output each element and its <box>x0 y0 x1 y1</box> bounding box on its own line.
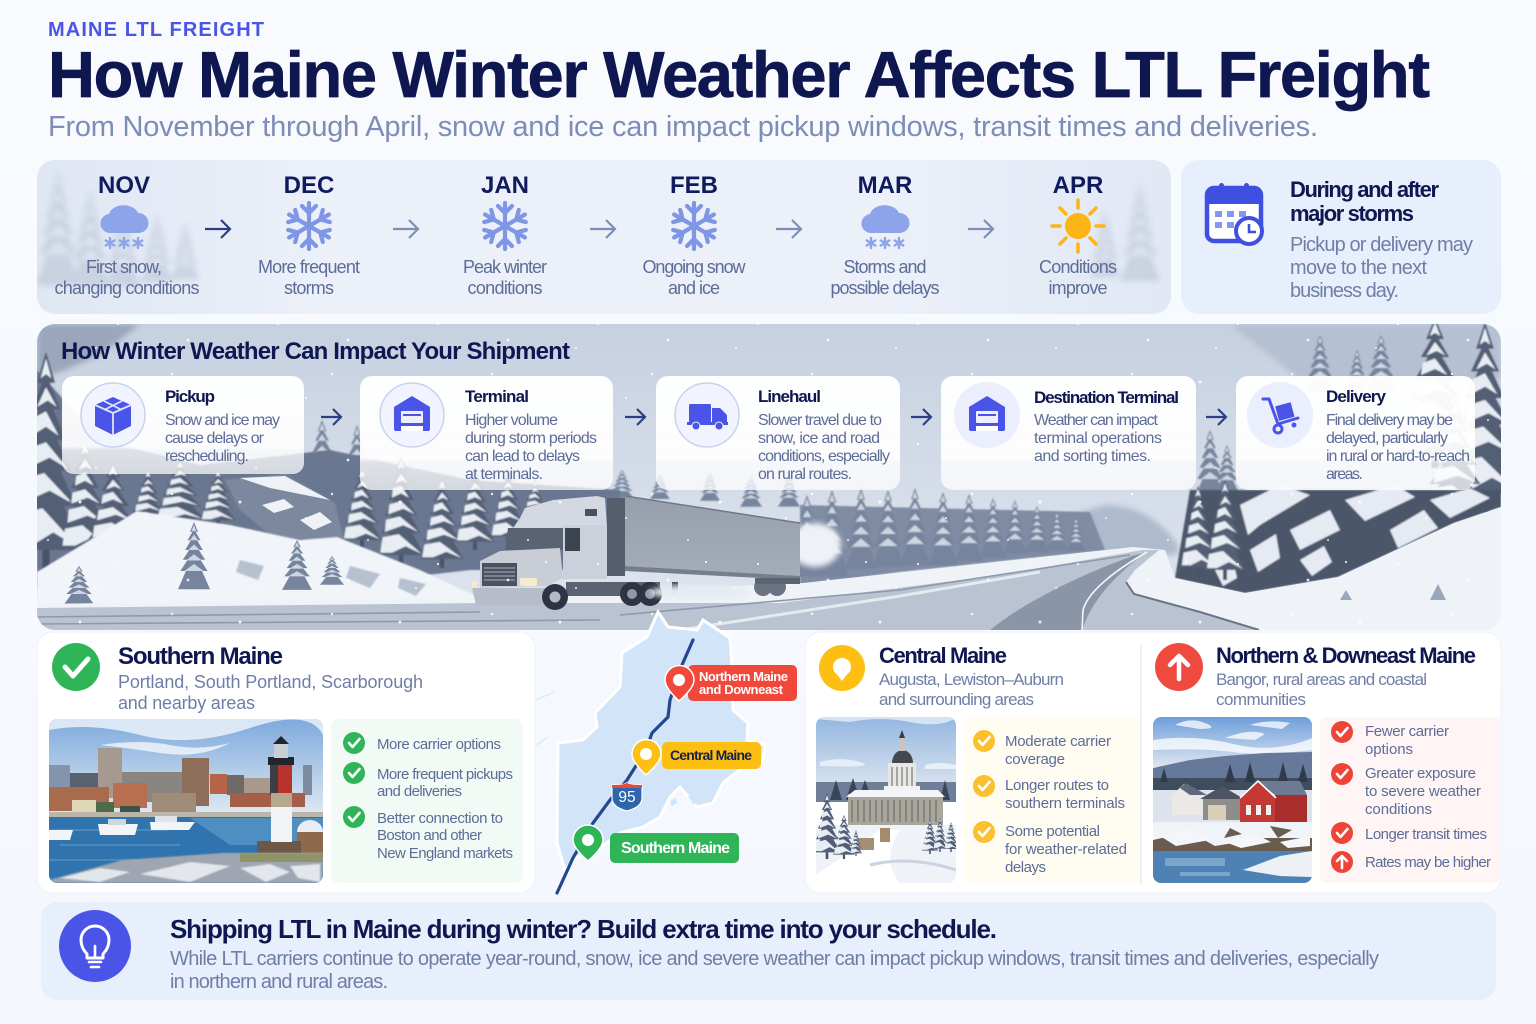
step card: Delivery: delayed, particularly <box>1326 430 1448 447</box>
background trees above cards <box>305 318 1520 520</box>
description <box>879 670 1064 709</box>
body text: move to the next <box>1290 257 1427 279</box>
list: central considerations: coverage <box>1005 751 1065 768</box>
icon: destination terminal <box>969 396 1005 431</box>
description <box>118 672 423 713</box>
month: January: conditions <box>468 278 542 298</box>
pin and label: Northern Maine and Downeast <box>665 665 797 701</box>
list: central considerations: delays <box>1005 859 1046 876</box>
snowy hillside <box>37 510 474 604</box>
step card: Pickup: Snow and ice may <box>165 412 280 429</box>
arrow <box>968 220 993 238</box>
list: southern benefits: Boston and other <box>377 827 482 844</box>
panel: during and after major storms <box>1181 160 1501 314</box>
description: Bangor, rural areas and coastal <box>1216 670 1427 689</box>
list: southern benefits <box>331 719 523 883</box>
list: central considerations: Some potential <box>1005 823 1100 840</box>
icon: snow cloud <box>100 205 149 248</box>
month: December: DEC <box>284 172 334 199</box>
list: central considerations: for weather-related <box>1005 841 1127 858</box>
callout heading: Shipping LTL in Maine during winter? Build extra time into your schedule. <box>170 914 997 944</box>
pin and label: Central Maine <box>632 740 761 775</box>
middle forest <box>790 488 1105 586</box>
month: November: NOV <box>98 172 150 199</box>
month: February: FEB <box>670 172 718 199</box>
callout body <box>170 948 1379 993</box>
I-95 shield: 95 <box>618 789 636 806</box>
step card: Terminal: Terminal <box>465 387 529 406</box>
list: southern benefits: More carrier options <box>377 736 501 753</box>
step card: Destination Terminal: Destination Terminal <box>1034 388 1179 407</box>
month: December: More frequent <box>258 257 360 277</box>
arrow <box>625 409 645 425</box>
list: central considerations: Moderate carrier <box>1005 733 1111 750</box>
step card: Destination Terminal: terminal operations <box>1034 430 1162 447</box>
icon: snow cloud <box>861 205 910 248</box>
panel: Southern Maine <box>37 632 535 893</box>
step card: Pickup: cause delays or <box>165 430 265 447</box>
photo: coastal houses in snow <box>1153 717 1312 883</box>
arrow <box>776 220 801 238</box>
pin and label: Southern Maine <box>573 825 739 863</box>
step card: Delivery: Delivery <box>1326 387 1387 406</box>
heading <box>1290 177 1439 226</box>
month: February <box>642 172 746 298</box>
step card: Delivery: areas. <box>1326 466 1363 483</box>
step card: Terminal: can lead to delays <box>465 448 580 465</box>
icon: green check badge <box>52 643 100 691</box>
icon: rate increase arrow <box>1331 851 1353 873</box>
step card: Linehaul: Slower travel due to <box>758 412 882 429</box>
month: April: improve <box>1048 278 1108 298</box>
step card: Delivery: Final delivery may be <box>1326 412 1453 429</box>
heading: major storms <box>1290 201 1414 226</box>
callout body: While LTL carriers continue to operate year-round, snow, ice and severe weather can impact pickup windows, transit times and deliveries, especially <box>170 948 1379 970</box>
step card: Pickup: Pickup <box>165 387 215 406</box>
icon: snowflake <box>671 203 717 249</box>
list: central considerations: southern terminals <box>1005 795 1125 812</box>
list: northern considerations: to severe weather <box>1365 783 1481 800</box>
step card: Destination Terminal: Weather can impact <box>1034 412 1159 429</box>
list: northern considerations: Greater exposure <box>1365 765 1476 782</box>
description: and surrounding areas <box>879 690 1034 709</box>
month: December <box>258 172 360 298</box>
list: northern considerations: Fewer carrier <box>1365 723 1449 740</box>
distant hill <box>1030 505 1178 555</box>
icon: snowflake <box>286 203 332 249</box>
list: northern considerations: Longer transit times <box>1365 826 1487 843</box>
pin and label: Southern Maine: Southern Maine <box>621 840 730 857</box>
list: southern benefits: More frequent pickups <box>377 766 513 783</box>
rocky snow ledge <box>225 474 345 545</box>
step card: Linehaul: on rural routes. <box>758 466 852 483</box>
icon: light bulb <box>59 910 131 982</box>
list: northern considerations <box>1320 717 1500 883</box>
month: November: First snow, <box>86 257 162 277</box>
left forest <box>10 352 620 590</box>
description: Portland, South Portland, Scarborough <box>118 672 423 692</box>
icon: yellow badge <box>819 645 865 691</box>
pin and label: Central Maine: Central Maine <box>670 747 752 763</box>
arrow <box>321 409 341 425</box>
month: March: Storms and <box>844 257 926 277</box>
month: January: Peak winter <box>463 257 547 277</box>
list: southern benefits: Better connection to <box>377 810 503 827</box>
list: northern considerations: options <box>1365 741 1413 758</box>
heading: Southern Maine <box>118 643 283 670</box>
body text: Pickup or delivery may <box>1290 234 1473 256</box>
pin and label: Northern Maine and Downeast: Northern Maine <box>699 669 788 684</box>
step card: Pickup: rescheduling. <box>165 448 249 465</box>
step card: Linehaul: snow, ice and road <box>758 430 880 447</box>
step card: Delivery: in rural or hard-to-reach <box>1326 448 1470 465</box>
step card: Terminal: at terminals. <box>465 466 543 483</box>
description <box>1216 670 1427 709</box>
step card: Delivery <box>1236 376 1475 490</box>
panel: Central Maine <box>805 632 1501 893</box>
icon: calendar with clock <box>1207 183 1262 244</box>
month: January: JAN <box>481 172 529 199</box>
list: southern benefits: and deliveries <box>377 783 462 800</box>
month: February: and ice <box>668 278 720 298</box>
I-95 route <box>557 640 693 893</box>
step card: Destination Terminal: and sorting times. <box>1034 448 1151 465</box>
month: February: Ongoing snow <box>642 257 746 277</box>
snow ground and road <box>37 507 1501 630</box>
callout body: in northern and rural areas. <box>170 971 388 993</box>
cliff forest right <box>1175 480 1501 593</box>
step card: Linehaul: conditions, especially <box>758 448 890 465</box>
description: Augusta, Lewiston–Auburn <box>879 670 1064 689</box>
truck <box>472 496 800 610</box>
month: November <box>54 172 200 298</box>
arrow <box>205 220 230 238</box>
title: How Maine Winter Weather Affects LTL Freight <box>48 38 1430 111</box>
icon: delivery truck <box>687 404 728 430</box>
arrow <box>911 409 931 425</box>
subtitle: From November through April, snow and ice can impact pickup windows, transit times and deliveries. <box>48 111 1318 143</box>
icon: red up-arrow badge <box>1155 643 1203 691</box>
heading: Northern & Downeast Maine: Northern & Downeast Maine <box>1216 643 1476 668</box>
panel: bottom callout <box>41 902 1496 1000</box>
I-95 shield <box>612 782 642 811</box>
description: and nearby areas <box>118 693 255 713</box>
step card: Pickup <box>62 376 304 474</box>
month: November: changing conditions <box>54 278 200 298</box>
heading: How Winter Weather Can Impact Your Shipment <box>61 338 570 365</box>
icon: hand cart <box>1263 399 1298 433</box>
arrow <box>393 220 418 238</box>
icon: sun <box>1052 200 1104 252</box>
list: northern considerations: conditions <box>1365 801 1432 818</box>
photo: Augusta capitol in snow <box>814 717 958 883</box>
month: April: APR <box>1053 172 1103 199</box>
list: central considerations <box>964 717 1141 883</box>
icon: terminal building <box>394 396 430 431</box>
step card: Terminal: Higher volume <box>465 412 558 429</box>
step card: Terminal: during storm periods <box>465 430 597 447</box>
list: southern benefits: New England markets <box>377 845 513 862</box>
illustration: winter highway with truck <box>10 318 1520 630</box>
step card: Terminal <box>360 376 613 490</box>
month: March <box>830 172 940 298</box>
panel: monthly winter timeline <box>36 160 1171 314</box>
eyebrow: Maine LTL Freight: MAINE LTL FREIGHT <box>48 19 264 41</box>
panel: snowy road scene with shipment steps <box>10 318 1520 630</box>
photo: Portland harbor with lighthouse <box>49 719 323 883</box>
heading: Central Maine <box>879 643 1007 668</box>
body text: business day. <box>1290 280 1399 302</box>
month: March: MAR <box>858 172 912 199</box>
month: December: storms <box>284 278 334 298</box>
pin and label: Northern Maine and Downeast: and Downeast <box>699 682 784 697</box>
icon: snowflake <box>482 203 528 249</box>
map: Maine with I-95 corridor <box>536 612 797 893</box>
step card: Destination Terminal <box>941 376 1196 490</box>
month: January <box>463 172 547 298</box>
description: communities <box>1216 690 1306 709</box>
month: March: possible delays <box>830 278 940 298</box>
icon: package box <box>95 397 131 435</box>
list: central considerations: Longer routes to <box>1005 777 1109 794</box>
list: northern considerations: Rates may be higher <box>1365 854 1491 871</box>
arrow <box>590 220 615 238</box>
heading: During and after <box>1290 177 1439 202</box>
month: April <box>1039 172 1117 298</box>
step card: Linehaul <box>656 376 900 490</box>
arrow <box>1206 409 1226 425</box>
step card: Linehaul: Linehaul <box>758 387 821 406</box>
month: April: Conditions <box>1039 257 1117 277</box>
body text <box>1290 234 1473 302</box>
